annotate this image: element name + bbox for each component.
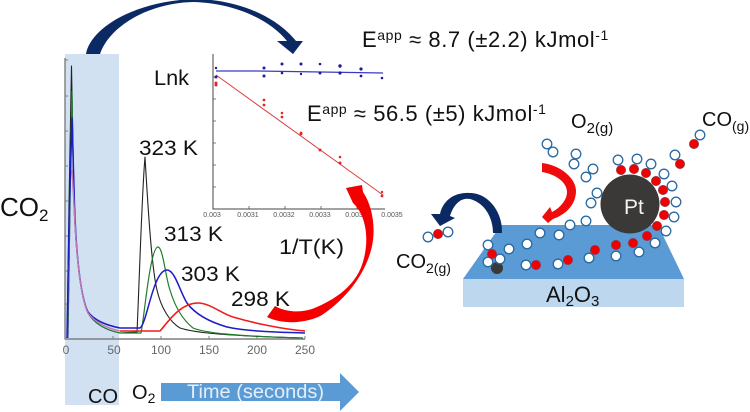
text: Eapp high value: app — [322, 101, 347, 117]
label: O2(g): O — [571, 111, 587, 133]
arrow: time axis — [161, 373, 359, 411]
label: Al2O3: Al — [546, 282, 566, 307]
label: CO: CO — [88, 386, 118, 408]
temperature labels: 303 K — [181, 263, 240, 286]
y-axis label: CO2: 2 — [39, 206, 48, 225]
x-axis tick labels: 200 — [247, 343, 267, 357]
label: CO(g): CO — [702, 109, 732, 131]
x-axis tick labels — [63, 343, 315, 357]
blue fit line — [216, 71, 383, 73]
dark site — [491, 262, 503, 274]
arrow: red O2 adsorption — [542, 163, 576, 223]
arrow: dark blue arc from CO band to inset — [86, 0, 303, 54]
text: Eapp high value: ≈ 56.5 (±5) kJmol — [347, 101, 533, 126]
arrow: time axis: Time (seconds) — [187, 382, 324, 403]
y-axis label: CO2: CO — [0, 192, 39, 222]
inset tick labels: 0.0033 — [309, 212, 331, 219]
label: Al2O3: 3 — [591, 293, 599, 310]
text: Eapp low value: ≈ 8.7 (±2.2) kJmol — [402, 27, 595, 52]
label: Al2O3: 2 — [566, 293, 574, 310]
x-axis tick labels: 100 — [151, 343, 171, 357]
blue data points — [214, 62, 383, 79]
label: O2(g): 2(g) — [587, 120, 613, 137]
323 K curve — [67, 66, 303, 338]
x-axis tick labels: 50 — [107, 343, 121, 357]
temperature labels — [139, 137, 290, 311]
x-axis tick labels: 250 — [295, 343, 315, 357]
label: CO2(g): CO — [396, 251, 426, 273]
Pt particle — [600, 174, 660, 234]
label: O2: 2 — [148, 390, 156, 406]
carbon atoms — [433, 139, 699, 270]
inset tick labels: 0.0035 — [381, 212, 403, 219]
label: CO2(g): 2(g) — [426, 260, 451, 276]
panel: CO exposure band — [65, 54, 119, 405]
chart: CO2 transient curves — [65, 58, 305, 339]
label: Al2O3: O — [574, 282, 591, 307]
inset tick labels: 0.003 — [203, 212, 221, 219]
inset x-axis label: 1/T(K): 1/T(K) — [279, 236, 344, 259]
x-axis tick labels: 0 — [63, 343, 70, 357]
initial pink overlay — [72, 170, 120, 331]
inset tick labels: 0.0031 — [237, 212, 259, 219]
text: Eapp low value: -1 — [595, 27, 609, 43]
red data points — [214, 82, 383, 197]
text: Eapp low value: app — [377, 27, 402, 43]
label: Pt: Pt — [624, 196, 644, 219]
inset y-axis label: Lnk: Lnk — [154, 67, 190, 90]
arrow: dark blue CO2 desorption — [431, 193, 502, 233]
arrow: red curve from 298 K to inset — [267, 185, 374, 322]
oxygen atoms — [423, 130, 705, 270]
chart: Arrhenius inset — [203, 54, 403, 219]
inset tick labels: 0.0034 — [345, 212, 367, 219]
x-axis tick labels: 150 — [199, 343, 219, 357]
303 K curve — [67, 118, 305, 338]
red fit line — [216, 75, 383, 195]
inset tick labels — [203, 212, 403, 219]
label: CO(g): (g) — [732, 118, 749, 134]
alumina front face — [463, 279, 684, 307]
text: Eapp low value: E — [362, 27, 377, 52]
temperature labels: 313 K — [164, 223, 223, 246]
panel: Pt/Al2O3 catalyst — [423, 130, 705, 310]
298 K curve — [120, 303, 305, 331]
temperature labels: 323 K — [139, 137, 198, 160]
temperature labels: 298 K — [231, 288, 290, 311]
inset tick labels: 0.0032 — [273, 212, 295, 219]
text: Eapp high value: E — [307, 101, 322, 126]
label: O2: O — [132, 382, 148, 404]
alumina top surface — [463, 225, 684, 279]
text: Eapp high value: -1 — [533, 101, 546, 117]
313 K curve — [68, 92, 303, 338]
